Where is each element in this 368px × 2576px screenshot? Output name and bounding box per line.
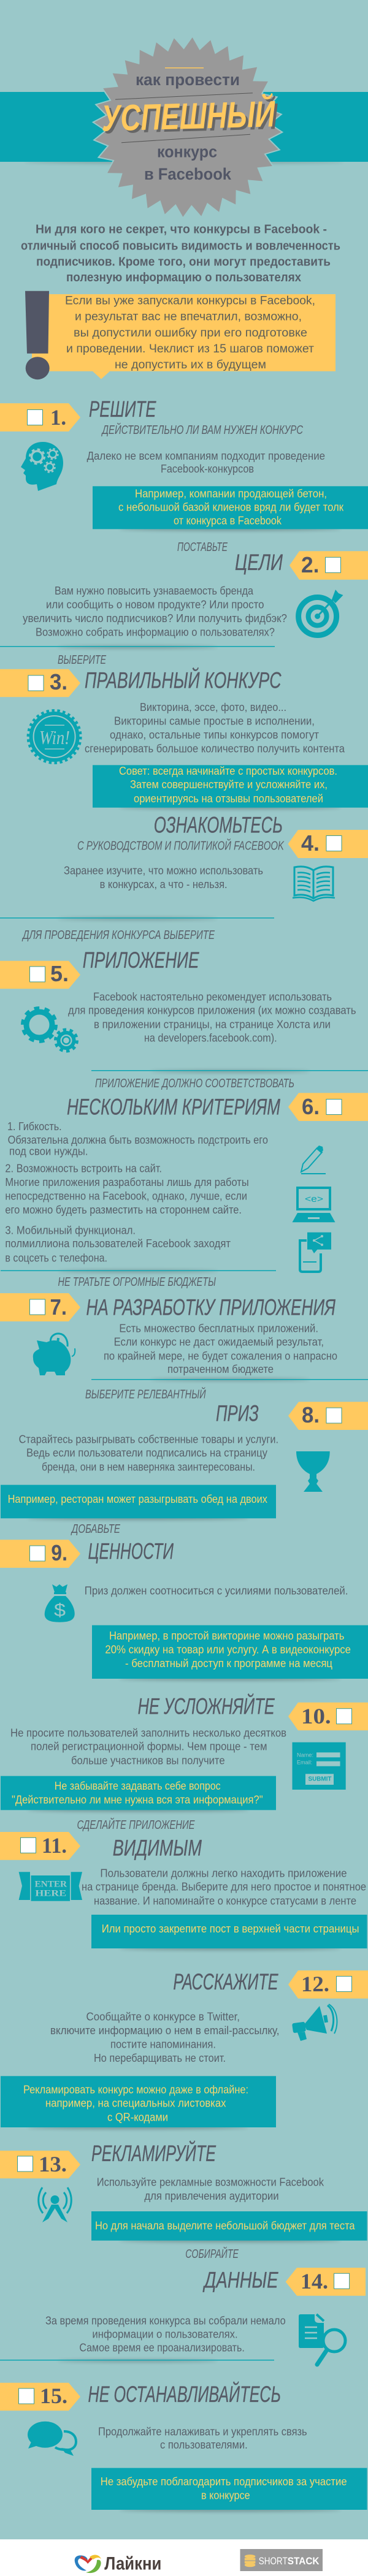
panel: step 2 (23, 541, 368, 638)
panel: step 8 (1, 1388, 368, 1520)
tag 1: 1. (50, 405, 66, 430)
body text (23, 585, 287, 638)
tag 8: 8. (302, 1402, 320, 1427)
tag 4: 4. (301, 830, 320, 856)
callout: в конкурсе (201, 2489, 250, 2501)
subheading: ДЛЯ ПРОВЕДЕНИЯ КОНКУРСА ВЫБЕРИТЕ (21, 929, 215, 942)
panel: step 15 (0, 2381, 367, 2512)
intro text: отличный способ повысить видимость и вовлеченность (21, 239, 340, 253)
tag 13: 13. (39, 2152, 67, 2176)
body text: criteria list: Обязательна должна быть возможность подстроить его (8, 1134, 268, 1146)
tag 14: 14. (301, 2269, 328, 2293)
callout: Затем совершенствуйте и усложняйте их, (130, 778, 328, 791)
heading: ЦЕННОСТИ (88, 1538, 174, 1563)
heading: ДАННЫЕ (202, 2267, 278, 2292)
callout: Например, в простой викторине можно разыграть (109, 1630, 344, 1642)
body text: Есть множество бесплатных приложений. (119, 1322, 318, 1334)
subheading: ВЫБЕРИТЕ (58, 653, 106, 667)
heading: ЦЕЛИ (235, 550, 283, 575)
tag 10: 10. (301, 1704, 331, 1728)
panel: step 6 (5, 1077, 368, 1272)
body text: criteria list: полмиллиона пользователей Facebook заходят (5, 1237, 231, 1250)
tag 9 (0, 1540, 80, 1568)
body text: информации о пользователях. (92, 2328, 238, 2340)
panel: step 5 (0, 929, 356, 1051)
heading: ПРАВИЛЬНЫЙ КОНКУРС (85, 667, 282, 693)
divider (1, 1270, 276, 1272)
body text: criteria list: 1. Гибкость. (7, 1120, 62, 1133)
title main word shadow: УСПЕШНЫЙ (104, 95, 279, 142)
heading: НЕСКОЛЬКИМ КРИТЕРИЯМ (67, 1094, 280, 1119)
icon: enter here ribbon: ENTER (35, 1879, 67, 1889)
body text: criteria list: непосредственно на Facebook, однако, лучше, если (5, 1190, 247, 1203)
heading: ПРИЗ (216, 1400, 259, 1426)
subheading: С РУКОВОДСТВОМ И ПОЛИТИКОЙ FACEBOOK (77, 839, 285, 853)
callout: например, на специальных листовках (45, 2097, 226, 2110)
body text: criteria list (5, 1120, 268, 1264)
callout: Например, ресторан может разыгрывать обед на двоих (8, 1493, 267, 1505)
title line 3: конкурс (157, 143, 217, 161)
icon: laptop with code: <e> (305, 1194, 323, 1204)
icon: enter here ribbon: HERE (35, 1888, 66, 1898)
subheading: ДОБАВЬТЕ (71, 1522, 120, 1536)
body text: Далеко не всем компаниям подходит проведение (87, 450, 325, 462)
icon: piggy bank (33, 1334, 75, 1375)
title block (0, 31, 368, 223)
panel: step 7 (0, 1275, 337, 1375)
logo: ShortStack: SHORT (259, 2555, 288, 2567)
subheading: ДЕЙСТВИТЕЛЬНО ЛИ ВАМ НУЖЕН КОНКУРС (101, 423, 303, 437)
body text: criteria list: 3. Мобильный функционал. (5, 1224, 136, 1236)
icon: open book (293, 867, 335, 901)
body text (98, 2425, 307, 2451)
panel: step 3 (0, 653, 368, 809)
tag 11: 11. (42, 1833, 67, 1858)
subheading: СДЕЛАЙТЕ ПРИЛОЖЕНИЕ (77, 1818, 195, 1832)
body text (50, 2011, 279, 2064)
body text: в приложении страницы, на странице Холста или (94, 1018, 331, 1030)
logo: ShortStack (240, 2549, 323, 2571)
icon: target with arrow (299, 590, 343, 635)
icon: sign-up form (292, 1742, 346, 1790)
subheading: СОБИРАЙТЕ (185, 2247, 239, 2261)
tag 10 (288, 1703, 368, 1730)
heading: ОЗНАКОМЬТЕСЬ (154, 812, 283, 837)
tag 1 (0, 403, 80, 431)
intro text: Ни для кого не секрет, что конкурсы в Facebook - (36, 223, 327, 237)
body text: Приз должен соотноситься с усилиями пользователей. (85, 1585, 348, 1597)
body text: полей регистрационной формы. Чем проще - тем (31, 1741, 267, 1753)
body text: criteria list: под свои нужды. (9, 1145, 88, 1157)
body text (85, 701, 345, 754)
body text (10, 1727, 286, 1766)
icon: broadcast antenna (39, 2187, 71, 2222)
body text: с пользователями. (160, 2439, 248, 2451)
icon: head with gears (21, 442, 63, 491)
body text: Используйте рекламные возможности Facebook (97, 2176, 324, 2189)
note text: Если вы уже запускали конкурсы в Facebook, (65, 295, 315, 308)
tag 15 (0, 2383, 80, 2411)
divider (91, 1070, 368, 1073)
icon: document with magnifier (299, 2314, 345, 2365)
icon: money bag (45, 1584, 75, 1622)
callout: yellow note with exclamation mark (25, 291, 335, 379)
body text: Если конкурс не даст ожидаемый результат, (114, 1336, 324, 1348)
tag 14 (286, 2268, 366, 2296)
callout: ориентируясь на отзывы пользователей (134, 792, 323, 805)
starburst badge (88, 31, 287, 223)
callout: Совет: всегда начинайте с простых конкурсов. (119, 765, 337, 777)
callout: от конкурса в Facebook (174, 515, 282, 527)
icon: win badge: Win! (39, 726, 70, 748)
panel: step 4 (64, 812, 368, 901)
heading: РЕШИТЕ (89, 397, 156, 422)
subheading: ПОСТАВЬТЕ (177, 541, 228, 554)
tag 7: 7. (50, 1294, 67, 1320)
body text: Пользователи должны легко находить приложение (100, 1867, 347, 1879)
body text: criteria list: Многие приложения разработаны лишь для работы (5, 1176, 249, 1188)
heading: ВИДИМЫМ (113, 1835, 202, 1860)
body text (64, 865, 263, 891)
intro text: полезную информацию о пользователях (66, 271, 301, 284)
heading: НЕ УСЛОЖНЯЙТЕ (138, 1693, 275, 1719)
callout (93, 765, 368, 809)
note text: не допустить их в будущем (115, 359, 266, 371)
tag 7 (0, 1293, 80, 1321)
callout: с QR-кодами (107, 2111, 168, 2124)
body text (82, 1867, 366, 1907)
body text: на developers.facebook.com). (144, 1032, 277, 1044)
tag 9: 9. (51, 1540, 67, 1565)
body text: или сообщить о новом продукте? Или просто (46, 598, 264, 610)
body text: бренда, они в нем наверняка заинтересованы. (42, 1461, 255, 1473)
body text: Самое время ее проанализировать. (79, 2342, 245, 2354)
icon: megaphone (292, 2004, 337, 2041)
note text: и результат вас не впечатлил, возможно, (75, 311, 302, 324)
subheading: ПРИЛОЖЕНИЕ ДОЛЖНО СООТВЕТСТВОВАТЬ (95, 1077, 294, 1090)
body text: Но перебарщивать не стоит. (94, 2052, 226, 2064)
body text: Викторины самые простые в исполнении, (114, 715, 315, 727)
body text (104, 1322, 337, 1375)
tag 8 (288, 1402, 368, 1430)
note text: и проведении. Чеклист из 15 шагов поможет (66, 343, 314, 355)
title line 1: как провести (136, 70, 240, 89)
note text: вы допустили ошибку при его подготовке (74, 327, 307, 340)
tag 4 (288, 830, 368, 858)
body text: потраченном бюджете (167, 1363, 274, 1375)
title line 4: в Facebook (144, 165, 232, 183)
body text: Заранее изучите, что можно использовать (64, 865, 263, 877)
divider (0, 918, 274, 920)
icon: enter here ribbon (19, 1872, 82, 1901)
tag 12: 12. (301, 1972, 329, 1996)
callout: Не забудьте поблагодарить подписчиков за участие (101, 2475, 347, 2488)
divider (0, 646, 275, 648)
callout: "Действительно ли мне нужна вся эта информация?" (12, 1793, 263, 1806)
callout (91, 1915, 367, 1950)
body text: Вам нужно повысить узнаваемость бренда (55, 585, 254, 597)
callout: Не забывайте задавать себе вопрос (55, 1780, 221, 1792)
body text: Викторина, эссе, фото, видео... (140, 701, 286, 713)
body text: Возможно собрать информацию о пользователях? (36, 626, 275, 638)
body text (97, 2176, 324, 2202)
body text (68, 990, 356, 1044)
callout (1, 2076, 276, 2129)
body text: criteria list: 2. Возможность встроить на сайт. (5, 1163, 162, 1175)
callout (1, 1776, 276, 1812)
heading: ПРИЛОЖЕНИЕ (83, 948, 199, 973)
callout: - бесплатный доступ к программе на месяц (125, 1657, 332, 1670)
note text (65, 295, 315, 371)
tag 2 (289, 551, 368, 580)
body text: Продолжайте налаживать и укреплять связь (98, 2425, 307, 2437)
body text: Facebook-конкурсов (161, 463, 254, 475)
icon: sign-up form: Email: (297, 1760, 312, 1766)
icon: chat bubbles (28, 2422, 76, 2456)
tag 6: 6. (302, 1094, 320, 1119)
icon: laptop with code (292, 1188, 335, 1222)
body text (19, 1433, 278, 1473)
body text: увеличить число подписчиков? Или получить фидбэк? (23, 612, 287, 625)
title main word: УСПЕШНЫЙ (101, 93, 277, 139)
callout (1, 1485, 276, 1520)
tag 13 (0, 2151, 80, 2178)
intro text (21, 223, 340, 284)
divider (0, 2360, 274, 2362)
body text: больше участников вы получите (71, 1754, 225, 1766)
icon: gears (23, 1009, 77, 1051)
icon: trophy (296, 1451, 330, 1492)
subheading: ВЫБЕРИТЕ РЕЛЕВАНТНЫЙ (85, 1388, 206, 1402)
tag 3: 3. (50, 669, 67, 694)
tag 6 (288, 1093, 368, 1121)
body text: Facebook настоятельно рекомендует использовать (93, 990, 332, 1003)
body text: по крайней мере, не будет сожаления о напрасно (104, 1350, 337, 1362)
panel: step 12 (1, 1969, 368, 2129)
icon: pencil (301, 1146, 326, 1174)
body text: однако, остальные типы конкурсов помогут (110, 729, 319, 741)
body text: включите информацию о нем в email-рассылку, (50, 2024, 279, 2037)
body text: сгенерировать большое количество получить контента (85, 742, 345, 754)
body text (87, 450, 325, 475)
tag 12 (288, 1970, 368, 1999)
heading: РАССКАЖИТЕ (173, 1969, 278, 1994)
callout: с небольшой базой клиенов вряд ли будет толк (118, 501, 343, 513)
heading: НЕ ОСТАНАВЛИВАЙТЕСЬ (88, 2381, 281, 2407)
logo: Лайкни (75, 2553, 161, 2574)
body text: для привлечения аудитории (144, 2190, 279, 2202)
icon: sign-up form: SUBMIT (308, 1776, 331, 1783)
tag 2: 2. (301, 552, 319, 577)
callout (92, 1625, 368, 1681)
callout (91, 2468, 367, 2512)
panel: step 14 (45, 2247, 366, 2365)
body text: Старайтесь разыгрывать собственные товары и услуги. (19, 1433, 278, 1445)
icon: sign-up form: Name: (297, 1752, 313, 1758)
panel: step 11 (0, 1818, 367, 1950)
tag 5 (0, 961, 80, 989)
heading: РЕКЛАМИРУЙТЕ (91, 2140, 217, 2166)
tag 11 (0, 1832, 80, 1860)
body text: Ведь если пользователи подписались на страницу (26, 1447, 267, 1459)
callout (93, 486, 368, 531)
body text: criteria list: в соцсеть с телефона. (5, 1252, 107, 1264)
divider (91, 1378, 368, 1381)
logo: Лайкни: Лайкни (104, 2553, 161, 2574)
body text: Не просите пользователей заполнить несколько десятков (10, 1727, 286, 1739)
logo: ShortStack: STACK (288, 2555, 320, 2567)
panel: step 13 (0, 2140, 367, 2242)
body text: Сообщайте о конкурсе в Twitter, (86, 2011, 240, 2023)
body text (45, 2314, 286, 2354)
body text: постите напоминания. (110, 2038, 216, 2051)
panel: step 10 (1, 1693, 368, 1812)
body text: За время проведения конкурса вы собрали немало (45, 2314, 286, 2327)
callout: Например, компании продающей бетон, (135, 488, 327, 500)
icon: win badge (28, 711, 80, 762)
callout: Рекламировать конкурс можно даже в офлайне: (23, 2084, 248, 2096)
tag 15: 15. (40, 2384, 67, 2408)
callout (91, 2211, 367, 2242)
icon: money bag: $ (54, 1600, 66, 1620)
intro text: подписчиков. Кроме того, они могут предоставить (36, 255, 331, 268)
subheading: НЕ ТРАТЬТЕ ОГРОМНЫЕ БЮДЖЕТЫ (58, 1275, 216, 1289)
tag 5: 5. (50, 961, 69, 986)
icon: phone with share (300, 1233, 331, 1272)
body text: в конкурсах, а что - нельзя. (100, 878, 228, 891)
callout: 20% скидку на товар или услугу. А в видеоконкурсе (105, 1644, 351, 1656)
panel: step 9 (0, 1522, 368, 1681)
body text: criteria list: его можно будеть разместить на стороннем сайте. (5, 1204, 242, 1216)
panel: step 1 (0, 397, 368, 531)
tag 3 (0, 669, 80, 697)
icon: exclamation mark (25, 291, 50, 379)
